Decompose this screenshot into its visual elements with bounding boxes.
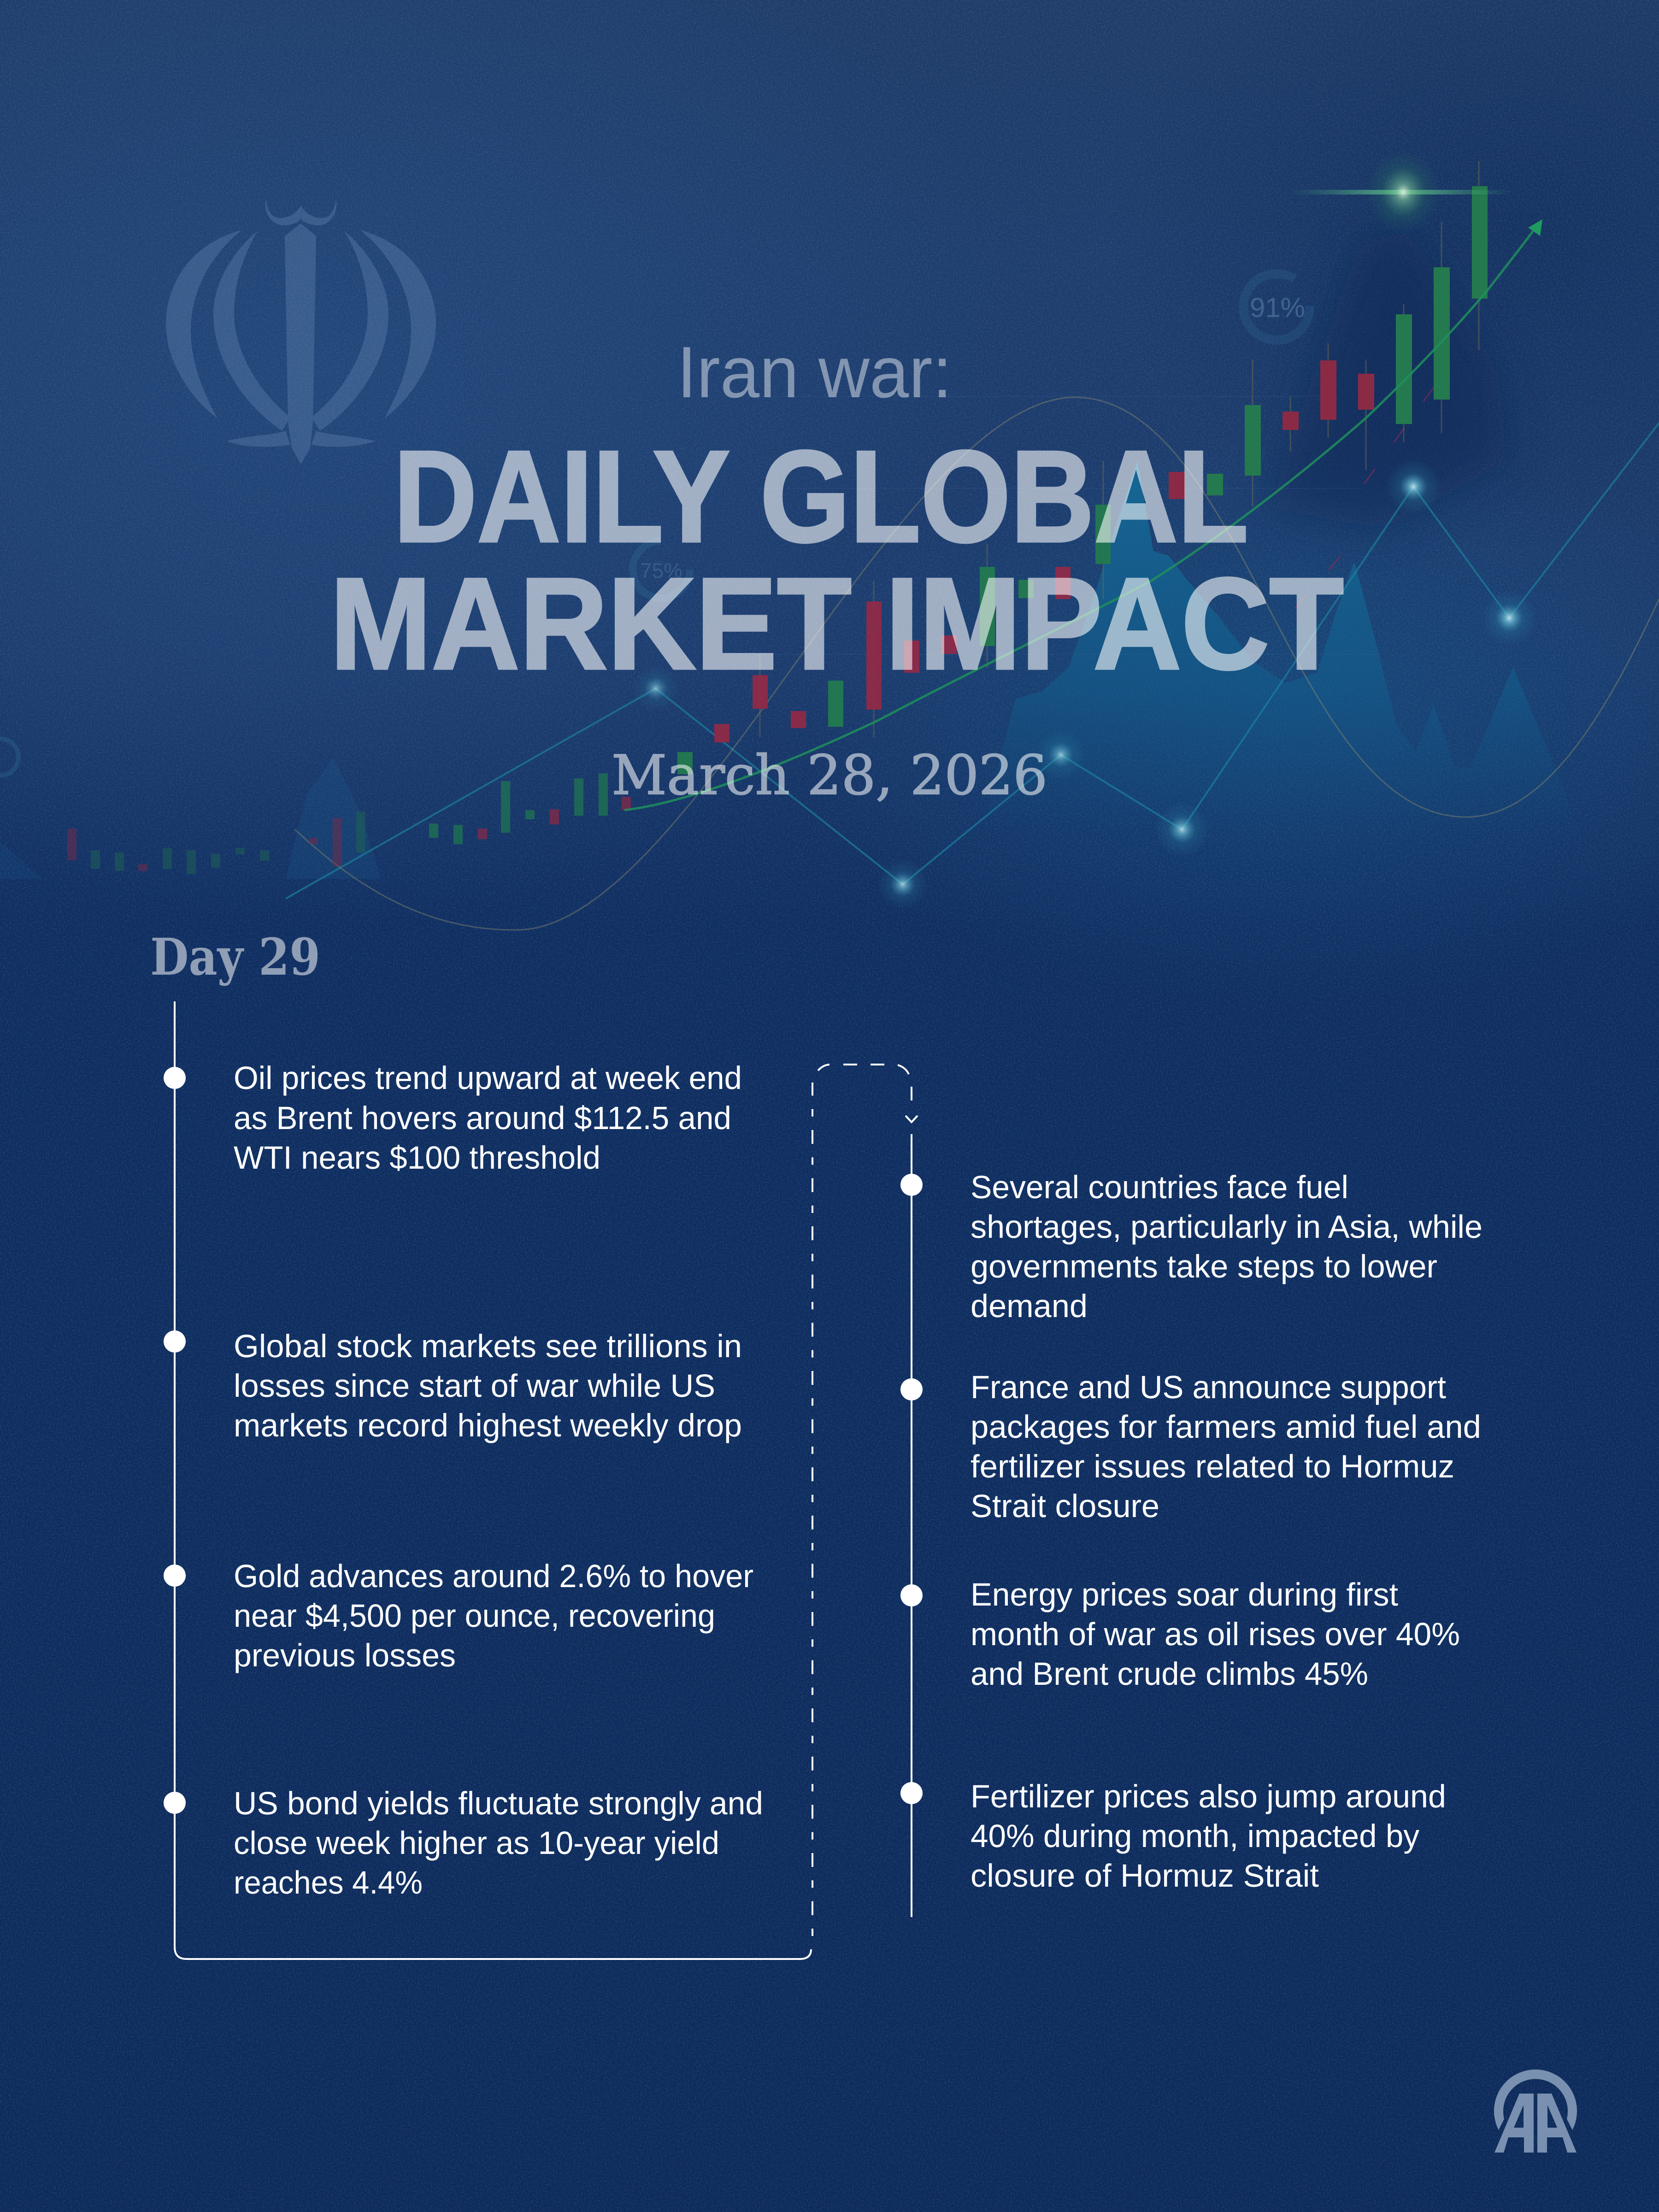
item: gold (164, 1558, 753, 1673)
title line 2: MARKET IMPACT (330, 551, 1344, 696)
item: stock markets: losses since start of war while US (234, 1368, 715, 1404)
chart backdrop: dark silhouette (1267, 226, 1507, 530)
title (330, 424, 1344, 696)
donut: 75%: 75% (640, 559, 682, 582)
donut: 91%: 91% (1250, 292, 1305, 323)
date: March 28, 2026 (612, 743, 1047, 807)
title line 1: DAILY GLOBAL (394, 424, 1248, 569)
donut: 91% (1243, 274, 1310, 340)
donut: 75% (633, 541, 690, 598)
heading: Day 29: Day 29 (150, 927, 320, 987)
item: fertilizer prices: 40% during month, impacted by (971, 1818, 1419, 1854)
area chart: teal mountains (0, 461, 1582, 879)
item: farmer support: fertilizer issues related to Hormuz (971, 1448, 1454, 1484)
donut: cropped left edge (0, 739, 18, 776)
icon: Iran emblem (166, 200, 436, 464)
item: farmer support: France and US announce support (971, 1369, 1446, 1405)
sine curve (295, 397, 1659, 930)
item: farmer support: Strait closure (971, 1488, 1159, 1524)
item: oil prices: Oil prices trend upward at week end (234, 1060, 742, 1096)
line chart: network nodes (286, 423, 1659, 910)
item: oil prices: WTI nears $100 threshold (234, 1140, 600, 1176)
item: oil prices: as Brent hovers around $112.5 and (234, 1100, 731, 1136)
connector: left timeline line (175, 1001, 811, 1959)
item: bond yields: close week higher as 10-year yield (234, 1825, 719, 1861)
star glint (1290, 151, 1512, 234)
item: gold: previous losses (234, 1637, 456, 1673)
item: fertilizer prices: closure of Hormuz Strait (971, 1858, 1319, 1894)
trend arrow (624, 219, 1542, 810)
item: energy prices: and Brent crude climbs 45% (971, 1656, 1368, 1692)
item: stock markets: markets record highest weekly drop (234, 1407, 742, 1443)
item: bond yields: reaches 4.4% (234, 1865, 423, 1900)
item: gold: near $4,500 per ounce, recovering (234, 1598, 715, 1634)
faded candles (91, 812, 365, 874)
item: stock markets (164, 1328, 742, 1443)
panel: right column items (900, 1169, 1483, 1894)
grid lines and dashed red trend (737, 369, 1447, 654)
item: energy prices (900, 1577, 1460, 1692)
wicks (760, 161, 1479, 737)
bright candles (1207, 186, 1488, 495)
item: bond yields (164, 1785, 763, 1900)
item: fuel shortages: shortages, particularly in Asia, while (971, 1209, 1483, 1245)
candlestick chart (67, 161, 1488, 874)
connector: dashed link with arrow (812, 1065, 918, 1936)
item: gold: Gold advances around 2.6% to hover (234, 1558, 753, 1594)
middle candles (677, 505, 1111, 774)
subtitle: Iran war: (677, 332, 952, 413)
item: farmer support (900, 1369, 1481, 1524)
item: oil prices (164, 1060, 742, 1176)
item: energy prices: month of war as oil rises over 40% (971, 1616, 1460, 1652)
item: fertilizer prices: Fertilizer prices also jump around (971, 1778, 1446, 1814)
connector: right timeline line (911, 1134, 912, 1917)
panel: left column items (164, 1060, 763, 1900)
small candles (429, 773, 608, 844)
item: stock markets: Global stock markets see trillions in (234, 1328, 742, 1364)
item: fuel shortages: demand (971, 1288, 1088, 1324)
item: fuel shortages: Several countries face fuel (971, 1169, 1348, 1205)
item: energy prices: Energy prices soar during first (971, 1577, 1398, 1612)
item: farmer support: packages for farmers amid fuel and (971, 1409, 1481, 1445)
item: fuel shortages (900, 1169, 1483, 1324)
item: fuel shortages: governments take steps to lower (971, 1248, 1437, 1284)
item: bond yields: US bond yields fluctuate strongly and (234, 1785, 763, 1821)
item: fertilizer prices (900, 1778, 1446, 1894)
icon: AA logo (1494, 2070, 1577, 2153)
